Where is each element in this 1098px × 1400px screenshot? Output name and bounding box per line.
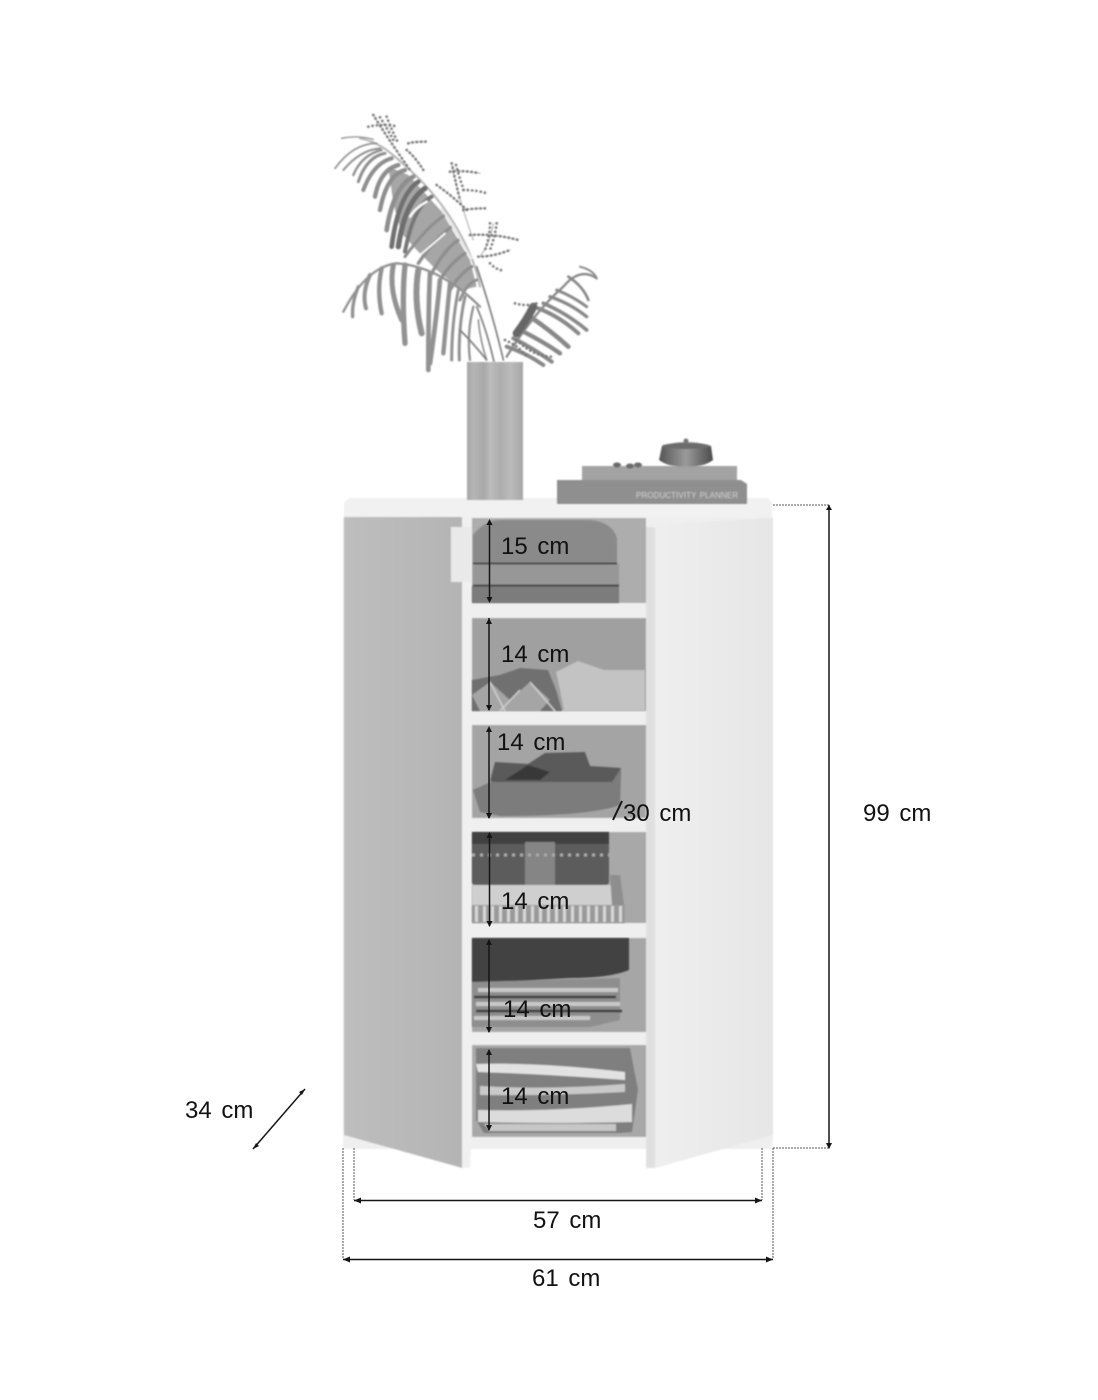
- bowl and pebbles: [613, 438, 713, 468]
- shelf 2 argyle sweater: [472, 668, 562, 711]
- compartment 2 background: [472, 618, 646, 711]
- shelf 5 light folded stack: [472, 978, 622, 1027]
- right door edge: [646, 527, 655, 1168]
- plant stems: [460, 267, 503, 362]
- lower book: [557, 480, 747, 504]
- cabinet: [343, 498, 773, 1179]
- berry clusters: [368, 115, 552, 357]
- bowl: [659, 442, 713, 467]
- compartment 5 background: [472, 938, 646, 1032]
- folded clothes: [472, 520, 645, 1133]
- dimension arrows: [253, 505, 829, 1260]
- bowl rim: [662, 443, 710, 449]
- label 14 cm shelf 6: 14 cm: [501, 1083, 569, 1110]
- label 14 cm shelf 5: 14 cm: [503, 996, 571, 1023]
- books: [557, 466, 747, 504]
- bowl knob: [684, 438, 688, 444]
- width 57 arrow: [354, 1200, 762, 1202]
- dimension labels: [185, 533, 931, 1292]
- arrow heads: [253, 505, 832, 1262]
- shelf height arrows: [488, 522, 490, 1130]
- label 57 cm: 57 cm: [533, 1207, 601, 1234]
- main palm frond: [335, 137, 480, 300]
- compartment 6 background: [472, 1045, 646, 1137]
- inner depth arrow: [613, 801, 622, 820]
- berry sprig stems: [373, 115, 518, 257]
- dimension guides: [343, 505, 829, 1259]
- label 99 cm: 99 cm: [863, 800, 931, 827]
- label 14 cm shelf 4: 14 cm: [501, 888, 569, 915]
- top panel: [344, 498, 772, 517]
- width 61 arrow: [343, 1258, 773, 1260]
- white gap under cabinet: [357, 1149, 761, 1179]
- upper book: [582, 466, 737, 483]
- left door: [344, 517, 462, 1168]
- shelf 4 patterned sweater: [472, 832, 609, 885]
- label 34 cm: 34 cm: [185, 1097, 253, 1124]
- compartment 4 background: [472, 832, 646, 923]
- shelf 2 pale knit: [556, 661, 645, 711]
- cabinet back and sides: [343, 517, 773, 1149]
- label 14 cm shelf 2: 14 cm: [501, 641, 569, 668]
- height arrow: [828, 505, 830, 1148]
- door handle: [451, 527, 471, 582]
- shelf 6 layered clothes: [476, 1048, 638, 1133]
- shelf 1 towels: [472, 520, 619, 603]
- label 30 cm: 30 cm: [623, 800, 691, 827]
- compartment 1 background: [472, 518, 646, 603]
- vase: [467, 362, 523, 500]
- label 14 cm shelf 3: 14 cm: [497, 729, 565, 756]
- plant: [335, 115, 597, 370]
- depth arrow: [253, 1089, 305, 1149]
- right door: [655, 518, 773, 1168]
- right palm frond: [507, 267, 597, 365]
- pebbles: [613, 462, 642, 468]
- shelf 4 striped shirts: [472, 875, 625, 923]
- book spine title: PRODUCTIVITY PLANNER: [636, 491, 738, 500]
- label 61 cm: 61 cm: [532, 1265, 600, 1292]
- shelf 5 dark folded stack: [472, 938, 629, 982]
- shelf 3 folded jeans: [473, 752, 621, 816]
- label 15 cm: 15 cm: [501, 533, 569, 560]
- compartment 3 background: [472, 725, 646, 818]
- lower left palm frond: [343, 263, 487, 370]
- left door edge: [462, 517, 471, 1168]
